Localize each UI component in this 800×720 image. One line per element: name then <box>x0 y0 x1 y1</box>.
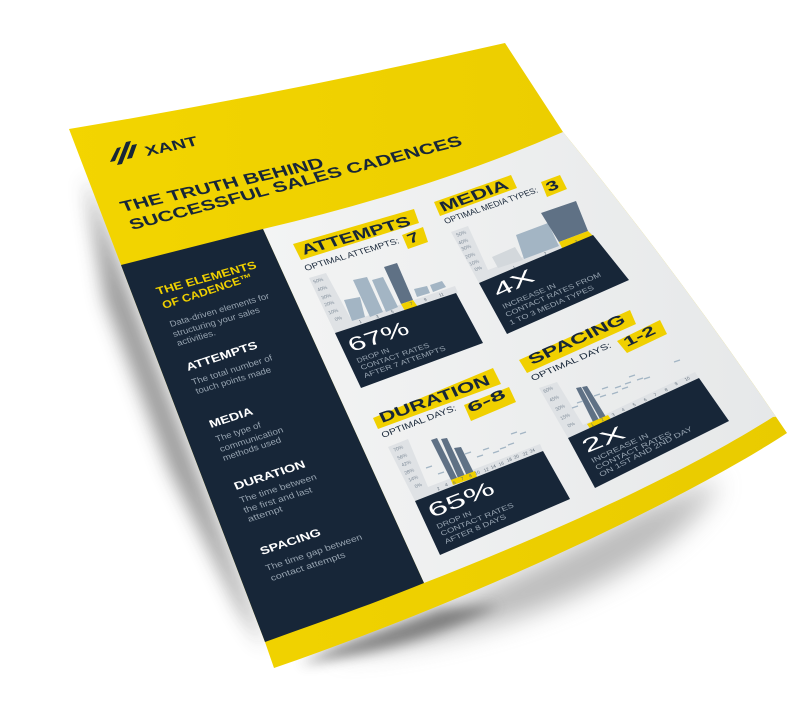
attempts stat callout: AFTER 7 ATTEMPTS <box>363 345 448 380</box>
spacing stat callout: 2X <box>578 423 630 457</box>
attempts optimal value: 7 <box>404 228 422 247</box>
duration bar chart: 6 <box>452 480 457 485</box>
duration optimal value <box>380 385 516 440</box>
attempts bar chart: 1 <box>358 319 363 324</box>
duration bar chart: 10 <box>474 469 481 476</box>
media bar chart: 40% <box>457 238 470 246</box>
duration bar chart: 14 <box>490 463 497 470</box>
attempts bar chart: 10% <box>327 308 340 316</box>
media bar chart <box>451 201 593 283</box>
media optimal value: 3 <box>542 176 562 195</box>
media stat callout <box>479 235 629 334</box>
duration stat callout: 65% <box>424 478 499 522</box>
spacing bar chart: 60% <box>542 385 555 395</box>
title <box>118 133 465 234</box>
attempts bar chart: 7 <box>409 301 414 306</box>
spacing bar chart: 7 <box>653 392 658 397</box>
page: yellow sheet <box>69 43 787 668</box>
sidebar intro: structuring your sales <box>171 305 261 339</box>
definition: spacing: contact attempts <box>269 550 347 583</box>
duration stat callout: CONTACT RATES <box>440 502 516 538</box>
page shadow <box>85 175 720 664</box>
attempts bar chart: 9 <box>423 297 428 302</box>
attempts heading <box>293 209 419 260</box>
sidebar heading: THE ELEMENTS <box>155 260 259 298</box>
spacing stat callout: CONTACT RATES <box>594 431 674 472</box>
spacing optimal value <box>529 320 667 383</box>
definition: duration: DURATION <box>232 459 308 493</box>
spacing stat callout <box>568 378 729 488</box>
definition: spacing <box>258 527 364 583</box>
title: SUCCESSFUL SALES CADENCES <box>127 133 465 234</box>
spacing bar chart <box>539 360 699 438</box>
duration bar chart: 7 <box>460 476 465 481</box>
spacing bar chart: 5 <box>632 402 637 407</box>
attempts bar chart: 0% <box>334 315 344 323</box>
media bar chart: 20% <box>464 252 477 260</box>
duration bar chart: 18 <box>506 456 513 463</box>
attempts stat callout <box>335 293 483 388</box>
spacing bar chart: 3 <box>611 412 616 417</box>
spacing bar chart: 45% <box>548 394 561 404</box>
spacing bar chart: 30% <box>554 403 567 413</box>
media bar chart: 2 <box>543 251 548 256</box>
definition: duration: The time between <box>238 472 318 505</box>
media optimal value: OPTIMAL MEDIA TYPES: <box>442 185 540 226</box>
icon: logo bars <box>110 141 137 165</box>
spacing heading <box>519 310 636 373</box>
definition: attempts: The total number of <box>190 352 275 387</box>
spacing heading: SPACING <box>525 311 629 368</box>
spacing stat callout: ON 1ST AND 2ND DAY <box>598 426 694 479</box>
definition: media <box>207 406 285 463</box>
duration bar chart: 12 <box>483 466 490 473</box>
duration bar chart: 16 <box>498 460 505 467</box>
media stat callout: 4X <box>489 266 539 302</box>
spacing bar chart: 6 <box>643 397 648 402</box>
attempts bar chart: 5 <box>390 309 395 314</box>
media bar chart: 10% <box>468 259 481 267</box>
attempts stat callout: CONTACT RATES <box>360 342 432 372</box>
duration heading <box>373 368 501 429</box>
media optimal value <box>442 175 567 226</box>
media bar chart: 50% <box>455 230 468 238</box>
duration bar chart: 70% <box>393 444 405 454</box>
spacing bar chart: 0% <box>566 421 577 429</box>
spacing optimal value: 1-2 <box>620 322 659 349</box>
duration optimal value: OPTIMAL DAYS: <box>380 403 458 440</box>
duration bar chart <box>388 432 543 501</box>
spacing bar chart: 4 <box>621 407 626 412</box>
definition: spacing: SPACING <box>258 527 323 558</box>
panel: duration <box>373 368 570 555</box>
sidebar intro: Data-driven elements for <box>168 291 271 329</box>
media stat callout: CONTACT RATES FROM <box>504 272 603 319</box>
logo wordmark: XANT <box>142 133 201 159</box>
spacing bar chart: 2 <box>600 417 605 422</box>
attempts optimal value <box>302 227 428 273</box>
duration heading: DURATION <box>376 372 493 427</box>
media bar chart: 1 <box>512 265 517 270</box>
attempts bar chart: 3 <box>375 314 380 319</box>
spacing bar chart: 15% <box>559 412 572 422</box>
media heading <box>434 175 517 216</box>
logo: XANT <box>110 133 201 165</box>
definition: media: MEDIA <box>207 406 255 431</box>
definition: media: methods used <box>221 435 283 463</box>
attempts bar chart: 50% <box>312 277 325 285</box>
definition: media: communication <box>218 425 285 454</box>
duration bar chart: 2 <box>436 486 441 491</box>
duration bar chart: 24 <box>529 447 536 454</box>
sidebar text <box>155 260 364 583</box>
sidebar intro: activities. <box>175 328 217 348</box>
definition: media: The type of <box>214 420 263 444</box>
definition: duration: the first and last <box>242 485 314 515</box>
media stat callout: 1 TO 3 MEDIA TYPES <box>508 285 596 327</box>
spacing bar chart: 1 <box>590 422 595 427</box>
duration bar chart: 28% <box>404 467 416 477</box>
definition: spacing: The time gap between <box>264 532 364 573</box>
panel: navy sidebar <box>121 229 424 642</box>
duration stat callout: DROP IN <box>436 510 473 531</box>
sidebar heading: OF CADENCE™ <box>161 272 255 312</box>
duration optimal value: 6-8 <box>464 385 508 416</box>
attempts bar chart: 40% <box>316 285 329 293</box>
definition: attempts: ATTEMPTS <box>184 340 259 374</box>
duration bar chart: 22 <box>522 450 529 457</box>
definition: duration: attempt <box>246 503 285 524</box>
spacing bar chart: 10 <box>684 375 691 382</box>
panel: grey content area <box>263 130 800 583</box>
panel: media <box>434 175 629 334</box>
spacing stat callout: INCREASE IN <box>590 433 650 465</box>
attempts bar chart: 30% <box>320 293 333 301</box>
spacing bar chart: 9 <box>674 381 679 386</box>
panel: attempts <box>293 209 483 388</box>
panel: spacing <box>519 310 729 488</box>
media bar chart: 0% <box>474 265 484 273</box>
media stat callout: INCREASE IN <box>501 283 558 311</box>
media bar chart: 3 <box>574 239 579 244</box>
spacing optimal value: OPTIMAL DAYS: <box>529 340 613 383</box>
duration bar chart: 20 <box>513 453 520 460</box>
attempts bar chart <box>309 263 458 333</box>
attempts optimal value: OPTIMAL ATTEMPTS: <box>302 236 401 273</box>
definition: attempts: touch points made <box>194 365 273 396</box>
duration bar chart: 56% <box>397 452 409 462</box>
sidebar heading <box>155 260 259 312</box>
definition: attempts <box>184 340 275 396</box>
duration bar chart: 0% <box>414 482 424 490</box>
attempts bar chart: 11 <box>438 292 445 298</box>
title: THE TRUTH BEHIND <box>118 155 327 216</box>
duration stat callout <box>415 451 570 555</box>
duration bar chart: 42% <box>401 459 413 469</box>
duration bar chart: 14% <box>408 474 420 484</box>
media heading: MEDIA <box>436 177 512 215</box>
duration bar chart: 4 <box>444 482 449 487</box>
attempts bar chart: 20% <box>323 300 336 308</box>
attempts heading: ATTEMPTS <box>298 213 414 259</box>
definition: duration <box>232 459 318 524</box>
attempts stat callout: 67% <box>344 318 414 356</box>
attempts stat callout: DROP IN <box>356 348 391 365</box>
duration bar chart: 8 <box>468 473 473 478</box>
duration stat callout: AFTER 8 DAYS <box>444 514 508 546</box>
media bar chart: 30% <box>460 244 473 252</box>
sidebar intro <box>168 291 271 348</box>
spacing bar chart: 8 <box>664 387 669 392</box>
